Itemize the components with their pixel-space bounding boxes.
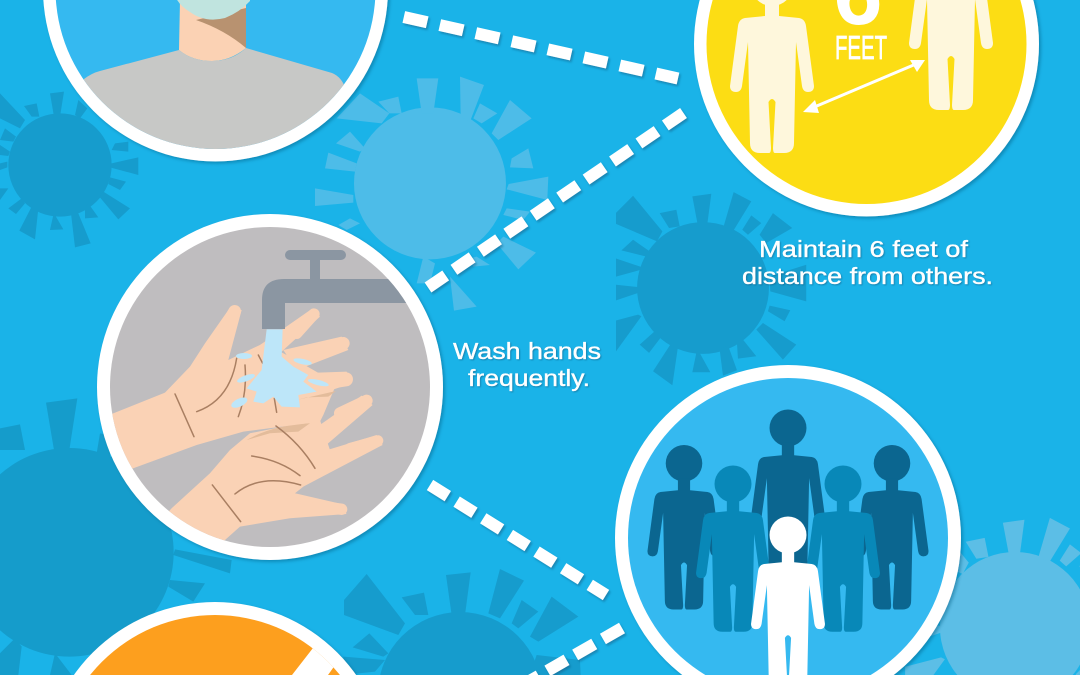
caption: maintain distance: [742, 236, 993, 289]
panel: no touching (orange): [74, 602, 358, 675]
crowd icons: [647, 409, 929, 675]
virus: large dark lower-left: [0, 398, 232, 675]
water: [230, 329, 329, 410]
two people icons: [730, 0, 993, 153]
caption: maintain distance: distance from others.: [742, 263, 993, 289]
dashed connector: distance to hand washing: [428, 113, 684, 288]
panel: six feet distance: [694, 0, 1039, 216]
prohibition slash: [292, 648, 334, 675]
dashed connector: hand washing to crowd: [430, 485, 606, 595]
panel: wash hands: [97, 214, 443, 563]
hands: [103, 309, 383, 563]
faucet: [262, 250, 410, 329]
caption: wash hands: frequently.: [468, 365, 590, 391]
upper hand: [103, 309, 352, 477]
masked person: [80, 0, 346, 160]
dashed connector: crowd to no-touch: [500, 628, 622, 675]
label feet: FEET: [835, 29, 887, 66]
lower hand: [169, 394, 384, 540]
caption: wash hands: Wash hands: [453, 338, 601, 364]
virus: dark right: [603, 192, 806, 385]
caption: wash hands: [453, 338, 601, 391]
caption: maintain distance: Maintain 6 feet of: [759, 236, 969, 262]
panel: face mask: [43, 0, 388, 162]
panel: avoid crowds: [615, 365, 961, 675]
double arrow: [803, 60, 925, 113]
virus: dark bottom centre: [343, 569, 581, 675]
virus: light lower-right: [901, 518, 1080, 675]
virus: dark left: [0, 92, 138, 247]
virus: light centre: [315, 77, 548, 311]
hands and faucet illustration: [112, 250, 406, 540]
dashed connector: mask to distance: [404, 17, 678, 78]
